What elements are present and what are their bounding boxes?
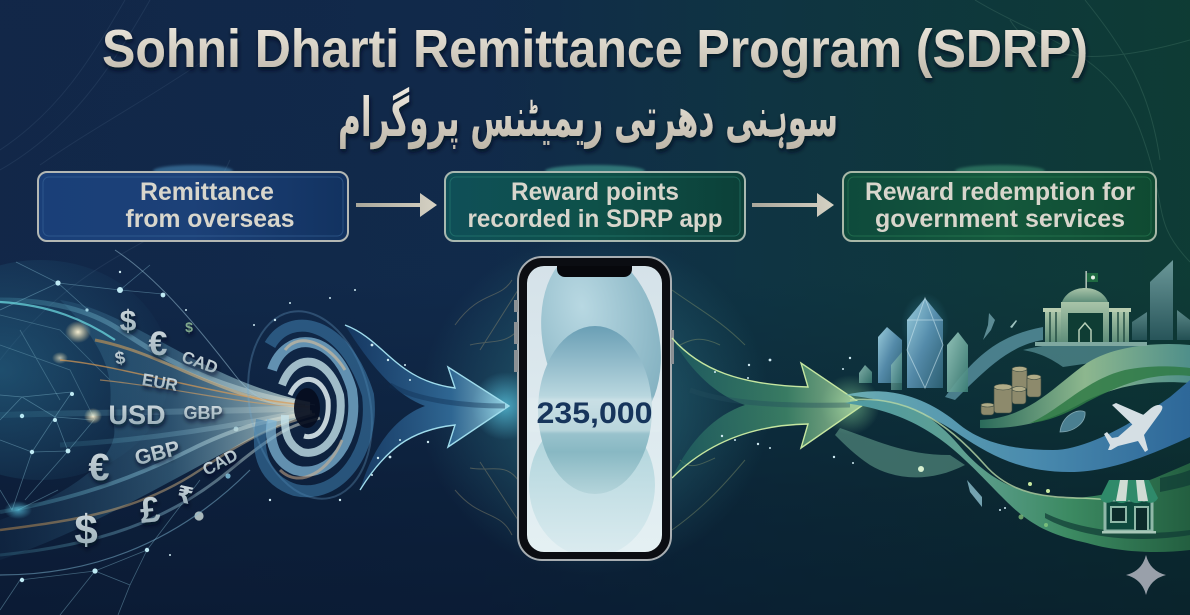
title: Sohni Dharti Remittance Program (SDRP) xyxy=(102,19,1088,79)
step 3: reward redemption: government services xyxy=(875,205,1125,233)
currency symbols: EUR xyxy=(141,370,179,395)
step 1: remittance from overseas: Remittance xyxy=(140,178,274,206)
currency symbols: CAD xyxy=(200,445,241,479)
currency symbols: GBP xyxy=(183,403,223,423)
currency symbols: $ xyxy=(113,347,127,369)
step 2: reward points recorded xyxy=(445,165,745,241)
urdu subtitle: سوہنی دھرتی ریمیٹنس پروگرام xyxy=(338,86,838,149)
step 1: remittance from overseas xyxy=(38,165,348,241)
reward points value: 235,000 xyxy=(536,397,652,430)
icon: sparkle watermark xyxy=(1126,555,1166,595)
green arrow out of phone xyxy=(672,338,880,478)
currency symbols: GBP xyxy=(132,437,182,470)
phone screen xyxy=(527,266,662,552)
currency symbols: $ xyxy=(185,319,193,335)
currency symbols: ₹ xyxy=(174,481,196,509)
government building xyxy=(1035,260,1190,346)
step 3: reward redemption xyxy=(843,165,1156,241)
currency symbols: $ xyxy=(74,506,98,553)
currency symbols: £ xyxy=(138,488,162,531)
step 2: reward points recorded: Reward points xyxy=(511,178,679,206)
phone frame xyxy=(518,257,671,560)
icon: airplane xyxy=(1104,403,1162,452)
arrow 1 xyxy=(356,193,437,217)
currency symbols: € xyxy=(149,325,168,363)
crystal city xyxy=(859,293,1017,507)
currency symbols: $ xyxy=(120,305,137,338)
icon: leaf shard xyxy=(1060,411,1085,432)
phone xyxy=(514,238,677,560)
currency symbols: CAD xyxy=(179,347,220,378)
step 1: remittance from overseas: from overseas xyxy=(126,205,294,233)
sparkle particles xyxy=(119,271,1006,556)
vortex xyxy=(232,300,388,510)
coin stacks xyxy=(981,366,1041,415)
icon: shop xyxy=(1100,480,1158,534)
currency symbols xyxy=(74,305,241,553)
redemption ribbons xyxy=(835,327,1190,552)
process flow xyxy=(38,165,1156,241)
data streams into vortex xyxy=(0,250,320,575)
global network xyxy=(0,262,238,615)
arrow 2 xyxy=(752,193,834,217)
step 2: reward points recorded: recorded in SDRP app xyxy=(468,205,722,233)
blue arrow into phone xyxy=(345,325,539,490)
step 3: reward redemption: Reward redemption for xyxy=(865,178,1135,206)
notch xyxy=(557,266,632,277)
phone halo ornaments xyxy=(455,280,745,535)
currency symbols: € xyxy=(88,447,110,489)
currency symbols: USD xyxy=(108,400,166,430)
